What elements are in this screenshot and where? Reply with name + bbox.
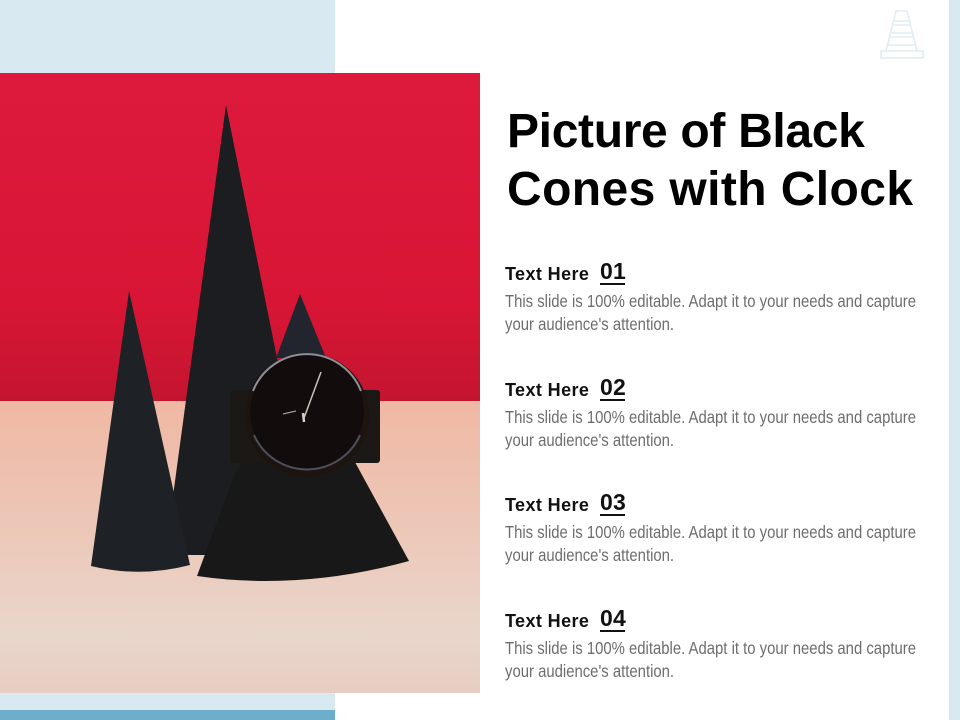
text item 04: 04 xyxy=(600,605,626,631)
watch sub dial hand xyxy=(283,411,296,414)
cone: back of watch xyxy=(276,294,326,358)
panel: darker blue bottom bar xyxy=(0,710,335,720)
icon: traffic cone xyxy=(880,10,924,59)
text item 03 xyxy=(505,489,916,565)
text item 04: Text Here xyxy=(505,611,589,631)
text item 02: This slide is 100% editable. Adapt it to your needs and capture xyxy=(505,407,916,427)
watch hour tick xyxy=(303,413,304,422)
watch bezel lower arc xyxy=(254,435,360,469)
text item 03: your audience's attention. xyxy=(505,545,674,565)
text item 04: This slide is 100% editable. Adapt it to your needs and capture xyxy=(505,638,916,658)
title: Cones with Clock xyxy=(507,163,913,216)
title xyxy=(507,105,914,216)
cone: tall back xyxy=(165,105,290,555)
cone: left small xyxy=(91,291,190,572)
cone: front right xyxy=(197,453,409,581)
text item 04 xyxy=(505,605,916,681)
text item 01 xyxy=(505,258,916,334)
watch minute hand xyxy=(304,372,321,418)
text item 01: 01 xyxy=(600,258,626,284)
watch case xyxy=(245,353,369,477)
text item 02 xyxy=(505,374,916,450)
text item 01: your audience's attention. xyxy=(505,314,674,334)
watch strap xyxy=(230,390,380,463)
text item 03: 03 xyxy=(600,489,626,515)
panel: light blue left background xyxy=(0,0,335,710)
watch dial xyxy=(250,355,364,469)
text item 03: Text Here xyxy=(505,495,589,515)
text item 04: your audience's attention. xyxy=(505,661,674,681)
title: Picture of Black xyxy=(507,105,865,158)
panel: light blue right strip xyxy=(949,0,960,720)
picture: black cones with clock xyxy=(0,73,480,693)
text item 02: your audience's attention. xyxy=(505,430,674,450)
text item 02: Text Here xyxy=(505,380,589,400)
text item 02: 02 xyxy=(600,374,626,400)
text item 03: This slide is 100% editable. Adapt it to your needs and capture xyxy=(505,522,916,542)
text item 01: This slide is 100% editable. Adapt it to your needs and capture xyxy=(505,291,916,311)
watch bezel upper highlight xyxy=(253,354,361,391)
text item 01: Text Here xyxy=(505,264,589,284)
